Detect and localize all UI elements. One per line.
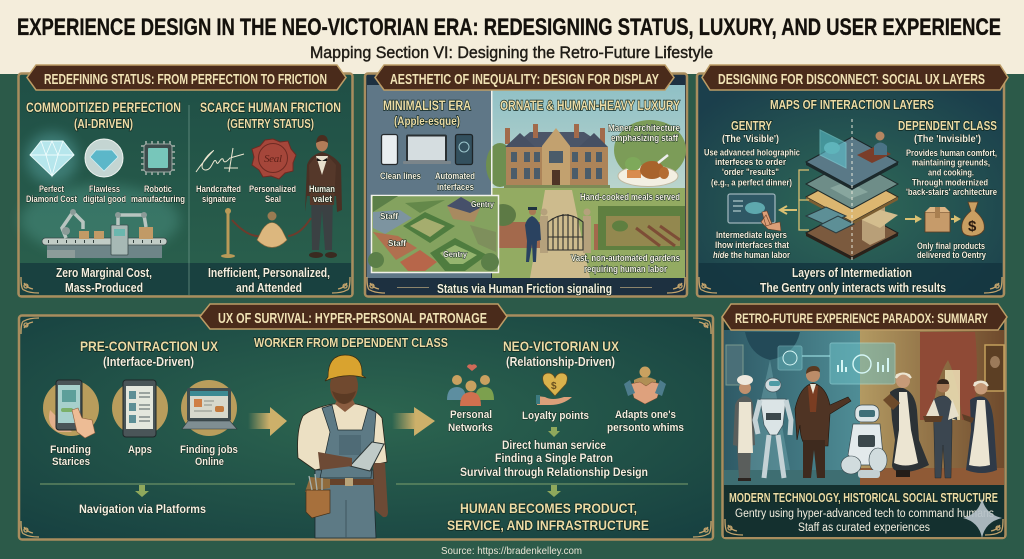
icon: loyalty heart in hand — [536, 373, 572, 405]
column: dependent class: Through modernized — [912, 178, 988, 188]
text: direct human service: Finding a Single Patron — [495, 453, 613, 465]
wall and gate — [490, 204, 604, 253]
icon: chip — [141, 141, 175, 175]
labels: gentry items: signature — [202, 194, 236, 204]
label: valet second line: valet — [313, 194, 332, 204]
caption: inefficient: and Attended — [236, 280, 302, 295]
banner: panel 3 — [702, 65, 1008, 90]
caption: layers of intermediation: The Gentry only interacts with results — [760, 281, 946, 295]
tablet — [350, 442, 384, 471]
icon: loyalty heart in hand: $ — [551, 381, 557, 392]
label: gardens: Vast, non-automated gardens — [571, 253, 680, 264]
labels: gentry items: Handcrafted — [196, 184, 241, 194]
icon: conveyor robots — [42, 209, 167, 258]
panel: ux of survival — [19, 304, 713, 540]
column: gentry: (The 'Visible') — [722, 133, 779, 145]
banner: panel 4: UX OF SURVIVAL: HYPER-PERSONAL PATRONAGE — [218, 311, 487, 327]
labels: pre-contraction items: Starices — [52, 456, 90, 468]
butler — [923, 379, 959, 478]
caption: modern technology — [729, 491, 998, 534]
conclusion: human becomes product: HUMAN BECOMES PRODUCT, — [460, 500, 637, 516]
panel: aesthetic of inequality — [365, 65, 687, 296]
heading: neo-victorian ux: NEO-VICTORIAN UX — [503, 338, 620, 354]
icon: handshake — [624, 366, 666, 404]
labels: neo-victorian items: Adapts one's — [615, 409, 676, 421]
panel: redefining status — [18, 65, 352, 296]
label: gardens — [571, 253, 680, 275]
column: gentry: interfeces to order — [715, 157, 786, 168]
caption: modern technology: Staff as curated experiences — [798, 522, 930, 534]
icon: devices — [382, 134, 472, 164]
label: intermediate layers: hide the human labor — [713, 250, 790, 261]
heading: pre-contraction: (Interface-Driven) — [103, 355, 194, 369]
heading: minimalist era — [383, 98, 471, 128]
robot — [755, 378, 791, 478]
labels: gentry items: Personalized — [249, 184, 296, 194]
heading: neo-victorian ux — [503, 338, 620, 369]
header band — [0, 0, 1024, 74]
banner: panel 1 — [27, 65, 346, 90]
column: gentry: 'order "results" — [722, 167, 779, 178]
icon: apps tablet — [112, 380, 168, 437]
label: manor architecture: Maner architecture — [608, 123, 680, 134]
icon: money bag: $ — [968, 218, 977, 235]
icon: signature — [196, 148, 244, 172]
labels: pre-contraction items: Funding — [50, 444, 91, 456]
label: manor architecture — [608, 123, 680, 144]
icon: funding phone — [43, 380, 99, 438]
arrows: package to money — [905, 215, 961, 223]
labels: gentry items: Seal — [265, 194, 281, 204]
label: final products: delivered to Oentry — [917, 250, 987, 261]
divider with arrow: navigation — [40, 484, 295, 497]
label: intermediate layers: Ihow interfaces that — [715, 240, 790, 251]
text: direct human service: Survival through Relationship Design — [460, 467, 648, 479]
column: dependent class: (The 'Invisible') — [914, 133, 981, 145]
labels: AI-driven items: manufacturing — [131, 194, 185, 204]
caption: modern technology: Gentry using hyper-advanced tech to command humans — [735, 508, 994, 520]
label: final products — [917, 241, 987, 261]
column: gentry — [704, 119, 800, 188]
heading: scarce human friction: SCARCE HUMAN FRICTION — [200, 99, 341, 115]
label: final products: Only final products — [917, 241, 985, 252]
ornate scene — [486, 85, 686, 278]
heading: neo-victorian ux: (Relationship-Driven) — [506, 355, 615, 369]
heading: minimalist era: (Apple-esque) — [394, 114, 460, 128]
arrow: to worker — [248, 407, 287, 436]
label: intermediate layers — [713, 230, 790, 261]
caption: zero marginal cost: Mass-Produced — [65, 280, 143, 295]
labels: minimal — [380, 171, 475, 193]
labels: AI-driven items: Perfect — [39, 184, 64, 194]
caption: status via friction: Status via Human Friction signaling — [437, 282, 612, 296]
hedge garden — [598, 206, 685, 250]
caption: inefficient: Inefficient, Personalized, — [208, 265, 330, 280]
labels: minimal: Automated — [435, 171, 475, 182]
caption: layers of intermediation: Layers of Intermediation — [792, 266, 912, 280]
labels: pre-contraction items: Finding jobs — [180, 444, 238, 456]
caption: zero marginal cost: Zero Marginal Cost, — [56, 265, 152, 280]
banner: panel 1: REDEFINING STATUS: FROM PERFECTION TO FRICTION — [44, 72, 327, 88]
icon: sparkle — [963, 498, 1002, 538]
figure: worker — [298, 355, 388, 538]
subtitle: Mapping Section VI: Designing the Retro-Future Lifestyle — [310, 43, 713, 62]
labels: minimal: Clean lines — [380, 171, 421, 182]
column: dependent class: DEPENDENT CLASS — [898, 119, 997, 133]
icon: money bag — [962, 202, 984, 236]
labels: neo-victorian items: personto whims — [607, 422, 684, 434]
caption: inefficient — [208, 265, 330, 295]
labels: minimal: interfaces — [437, 182, 474, 193]
labels: neo-victorian items: Personal — [450, 409, 492, 421]
column: dependent class: Provides human comfort, — [906, 148, 997, 159]
labels: neo-victorian items: Loyalty points — [522, 410, 589, 422]
diagram: interaction layers — [806, 119, 898, 260]
map inset — [368, 196, 499, 272]
caption: zero marginal cost — [56, 265, 152, 295]
labels: neo-victorian items: Networks — [448, 422, 493, 434]
scene — [724, 330, 1004, 485]
banner: panel 4 — [200, 304, 507, 329]
heading: minimalist era: MINIMALIST ERA — [383, 98, 471, 113]
holographic panels — [778, 343, 895, 384]
heading: commoditized perfection: (AI-DRIVEN) — [74, 117, 133, 131]
column: dependent class: maintaining greunds, — [912, 158, 990, 168]
label: human valet: Human — [309, 184, 335, 194]
icon: diamond — [26, 132, 78, 184]
heading: ornate luxury: ORNATE & HUMAN-HEAVY LUXURY — [500, 98, 680, 113]
column: dependent class — [898, 119, 997, 198]
heading: worker: WORKER FROM DEPENDENT CLASS — [254, 335, 448, 350]
heading: scarce human friction: (GENTRY STATUS) — [227, 117, 314, 131]
arrow: from worker — [392, 407, 435, 436]
panel: designing for disconnect — [697, 65, 1008, 296]
icon: wax seal — [252, 139, 296, 179]
divider with arrow: human — [396, 484, 688, 497]
chef — [733, 375, 755, 481]
maid 2 — [962, 382, 997, 473]
conclusion: human becomes product: SERVICE, AND INFRASTRUCTURE — [447, 517, 649, 533]
icon: box — [925, 207, 950, 232]
column: gentry: Use advanced holographic — [704, 148, 800, 158]
labels: pre-contraction items: Apps — [128, 444, 152, 456]
column: gentry: (e.g., a perfect dinner) — [711, 178, 792, 188]
label: hand-cooked meals: Hand-cooked meals served — [580, 192, 680, 203]
banner: panel 2 — [375, 65, 674, 90]
icon: valet — [305, 135, 342, 258]
heading: maps: MAPS OF INTERACTION LAYERS — [770, 98, 934, 112]
column: dependent class: 'back-stairs' architecture — [906, 187, 997, 198]
banner: panel 5 — [722, 304, 1007, 330]
icon: digital good — [85, 139, 123, 177]
mansion — [504, 124, 610, 188]
icon: tablet with hand — [728, 194, 781, 231]
map labels: Gentry — [443, 249, 467, 259]
icon: personal networks — [447, 364, 494, 406]
labels: neo-victorian items — [448, 409, 684, 434]
icon: meal plate — [618, 155, 678, 186]
conclusion: human becomes product — [447, 500, 649, 533]
icon: wax seal: Seal — [264, 153, 282, 165]
map labels — [380, 199, 494, 259]
labels: pre-contraction items — [50, 444, 238, 468]
gentleman — [795, 366, 851, 478]
labels: AI-driven items — [26, 184, 185, 204]
map labels: Gentry — [471, 199, 494, 209]
minimalist side — [367, 85, 491, 278]
labels: gentry items — [196, 184, 296, 204]
column: dependent class: and cooking. — [928, 168, 974, 178]
heading: commoditized perfection: COMMODITIZED PERFECTION — [26, 99, 181, 115]
labels: AI-driven items: digital good — [83, 194, 126, 204]
tool belt — [305, 474, 330, 518]
portrait — [985, 345, 1004, 391]
small robot — [841, 405, 887, 478]
heading: scarce human friction — [200, 99, 341, 131]
icon: stanchion and attended guest — [221, 208, 311, 258]
guard — [525, 207, 541, 262]
column: gentry: GENTRY — [731, 119, 773, 133]
labels: AI-driven items: Robotic — [144, 184, 172, 194]
heading: commoditized perfection — [26, 99, 181, 131]
text: direct human service — [460, 440, 648, 479]
label: gardens: requiring human labor — [584, 264, 667, 275]
label: manor architecture: emphasizing staff — [611, 133, 679, 144]
map labels: Staff — [388, 238, 406, 248]
labels: pre-contraction items: Online — [195, 456, 224, 468]
icon: laptop — [181, 380, 237, 436]
labels: AI-driven items: Diamond Cost — [26, 194, 77, 204]
bracket and arrow — [780, 170, 809, 230]
label: intermediate layers: Intermediate layers — [716, 230, 787, 241]
label: navigation: Navigation via Platforms — [79, 502, 206, 516]
text: direct human service: Direct human service — [502, 440, 606, 452]
panel: retro-future summary — [722, 304, 1007, 538]
heading: pre-contraction — [80, 338, 219, 369]
map labels: Staff — [380, 211, 398, 221]
arrow: small down — [548, 427, 560, 437]
heading: pre-contraction: PRE-CONTRACTION UX — [80, 338, 219, 354]
caption: layers of intermediation — [760, 266, 946, 295]
maid 1 — [883, 374, 929, 477]
source: Source: https://bradenkelley.com — [441, 545, 582, 557]
banner: panel 2: AESTHETIC OF INEQUALITY: DESIGN FOR DISPLAY — [390, 72, 659, 88]
labels: AI-driven items: Flawless — [89, 184, 120, 194]
